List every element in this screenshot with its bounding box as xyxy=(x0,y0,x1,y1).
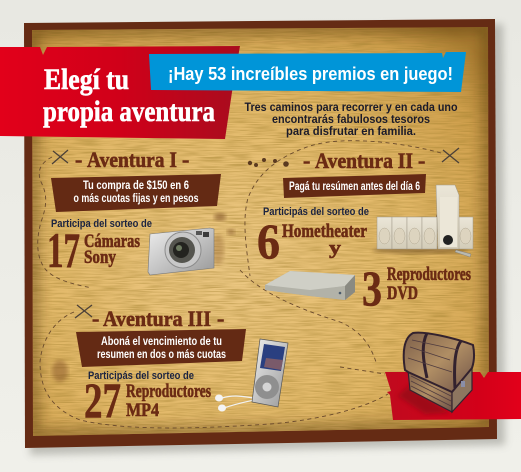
blue prize banner: ¡Hay 53 increíbles premios en juego! xyxy=(168,63,453,84)
icon: X mark II xyxy=(442,148,459,163)
brown condition box III xyxy=(76,329,246,367)
heading: aventura III: - xyxy=(92,306,99,331)
heading: aventura I: Aventura I xyxy=(87,147,177,172)
prize: 3 reproductores dvd: Reproductores xyxy=(387,264,471,285)
icon: home theater xyxy=(372,185,473,257)
brown condition box I: Tu compra de $150 en 6 xyxy=(83,180,189,192)
brown condition box II: Pagá tu resúmen antes del día 6 xyxy=(289,181,420,193)
prize: 27 reproductores mp4: Reproductores xyxy=(126,381,211,402)
intro text: Tres caminos para recorrer y en cada uno xyxy=(244,102,458,114)
icon: treasure chest xyxy=(398,333,474,414)
panel: aventura III xyxy=(75,305,288,428)
heading: aventura II: - xyxy=(303,148,310,173)
icon: mp4 player and earphones xyxy=(215,339,288,412)
title xyxy=(43,63,215,128)
heading: aventura III: - xyxy=(217,306,224,331)
red title banner xyxy=(0,46,240,139)
icon: camera xyxy=(148,228,214,275)
icon: X mark I xyxy=(52,150,68,164)
brown condition box III: Aboná el vencimiento de tu xyxy=(101,336,222,348)
prize: 6 hometheater y: Hometheater xyxy=(282,221,367,242)
brown condition box III: resumen en dos o más cuotas xyxy=(97,349,226,361)
prize: 17 cámaras sony: 17 xyxy=(47,222,80,278)
panel: aventura II xyxy=(257,148,473,316)
brown condition box I: o más cuotas fijas y en pesos xyxy=(74,193,198,205)
intro text: encontrarás fabulosos tesoros xyxy=(272,114,430,126)
icon: dvd player xyxy=(265,271,355,300)
prize: 27 reproductores mp4: MP4 xyxy=(126,400,159,421)
brown condition box II xyxy=(283,174,426,198)
blue prize banner xyxy=(149,52,466,92)
brown condition box I xyxy=(51,174,221,212)
heading: aventura I: - xyxy=(182,147,189,172)
sorteo label II: Participás del sorteo de xyxy=(263,206,369,218)
intro text xyxy=(244,102,458,138)
heading: aventura II: Aventura II xyxy=(315,148,413,173)
prize: 27 reproductores mp4: 27 xyxy=(84,372,121,428)
prize: 17 cámaras sony: Cámaras xyxy=(84,231,140,252)
title: Elegí tu xyxy=(44,63,129,96)
prize: 17 cámaras sony xyxy=(47,222,140,278)
heading: aventura II: - xyxy=(418,148,425,173)
prize: 17 cámaras sony: Sony xyxy=(84,247,116,268)
panel: aventura I xyxy=(47,147,221,278)
intro text: para disfrutar en familia. xyxy=(286,126,416,138)
heading: aventura III: Aventura III xyxy=(103,306,211,331)
treasure trail dashes xyxy=(38,141,460,428)
title: propia aventura xyxy=(43,95,215,128)
prize: 3 reproductores dvd: DVD xyxy=(387,283,418,304)
red bottom banner xyxy=(385,372,521,420)
prize: 6 hometheater y xyxy=(257,213,367,269)
prize: 6 hometheater y: 6 xyxy=(257,213,280,269)
icon: X mark III xyxy=(75,305,92,318)
heading: aventura I: - xyxy=(75,147,82,172)
prize: 3 reproductores dvd xyxy=(362,260,471,316)
sorteo label I: Participa del sorteo de xyxy=(51,218,152,230)
map parchment xyxy=(30,25,492,439)
prize: 3 reproductores dvd: 3 xyxy=(362,260,382,316)
prize: 27 reproductores mp4 xyxy=(84,372,211,428)
sorteo label III: Participás del sorteo de xyxy=(88,370,194,382)
prize: 6 hometheater y: y xyxy=(329,238,342,259)
